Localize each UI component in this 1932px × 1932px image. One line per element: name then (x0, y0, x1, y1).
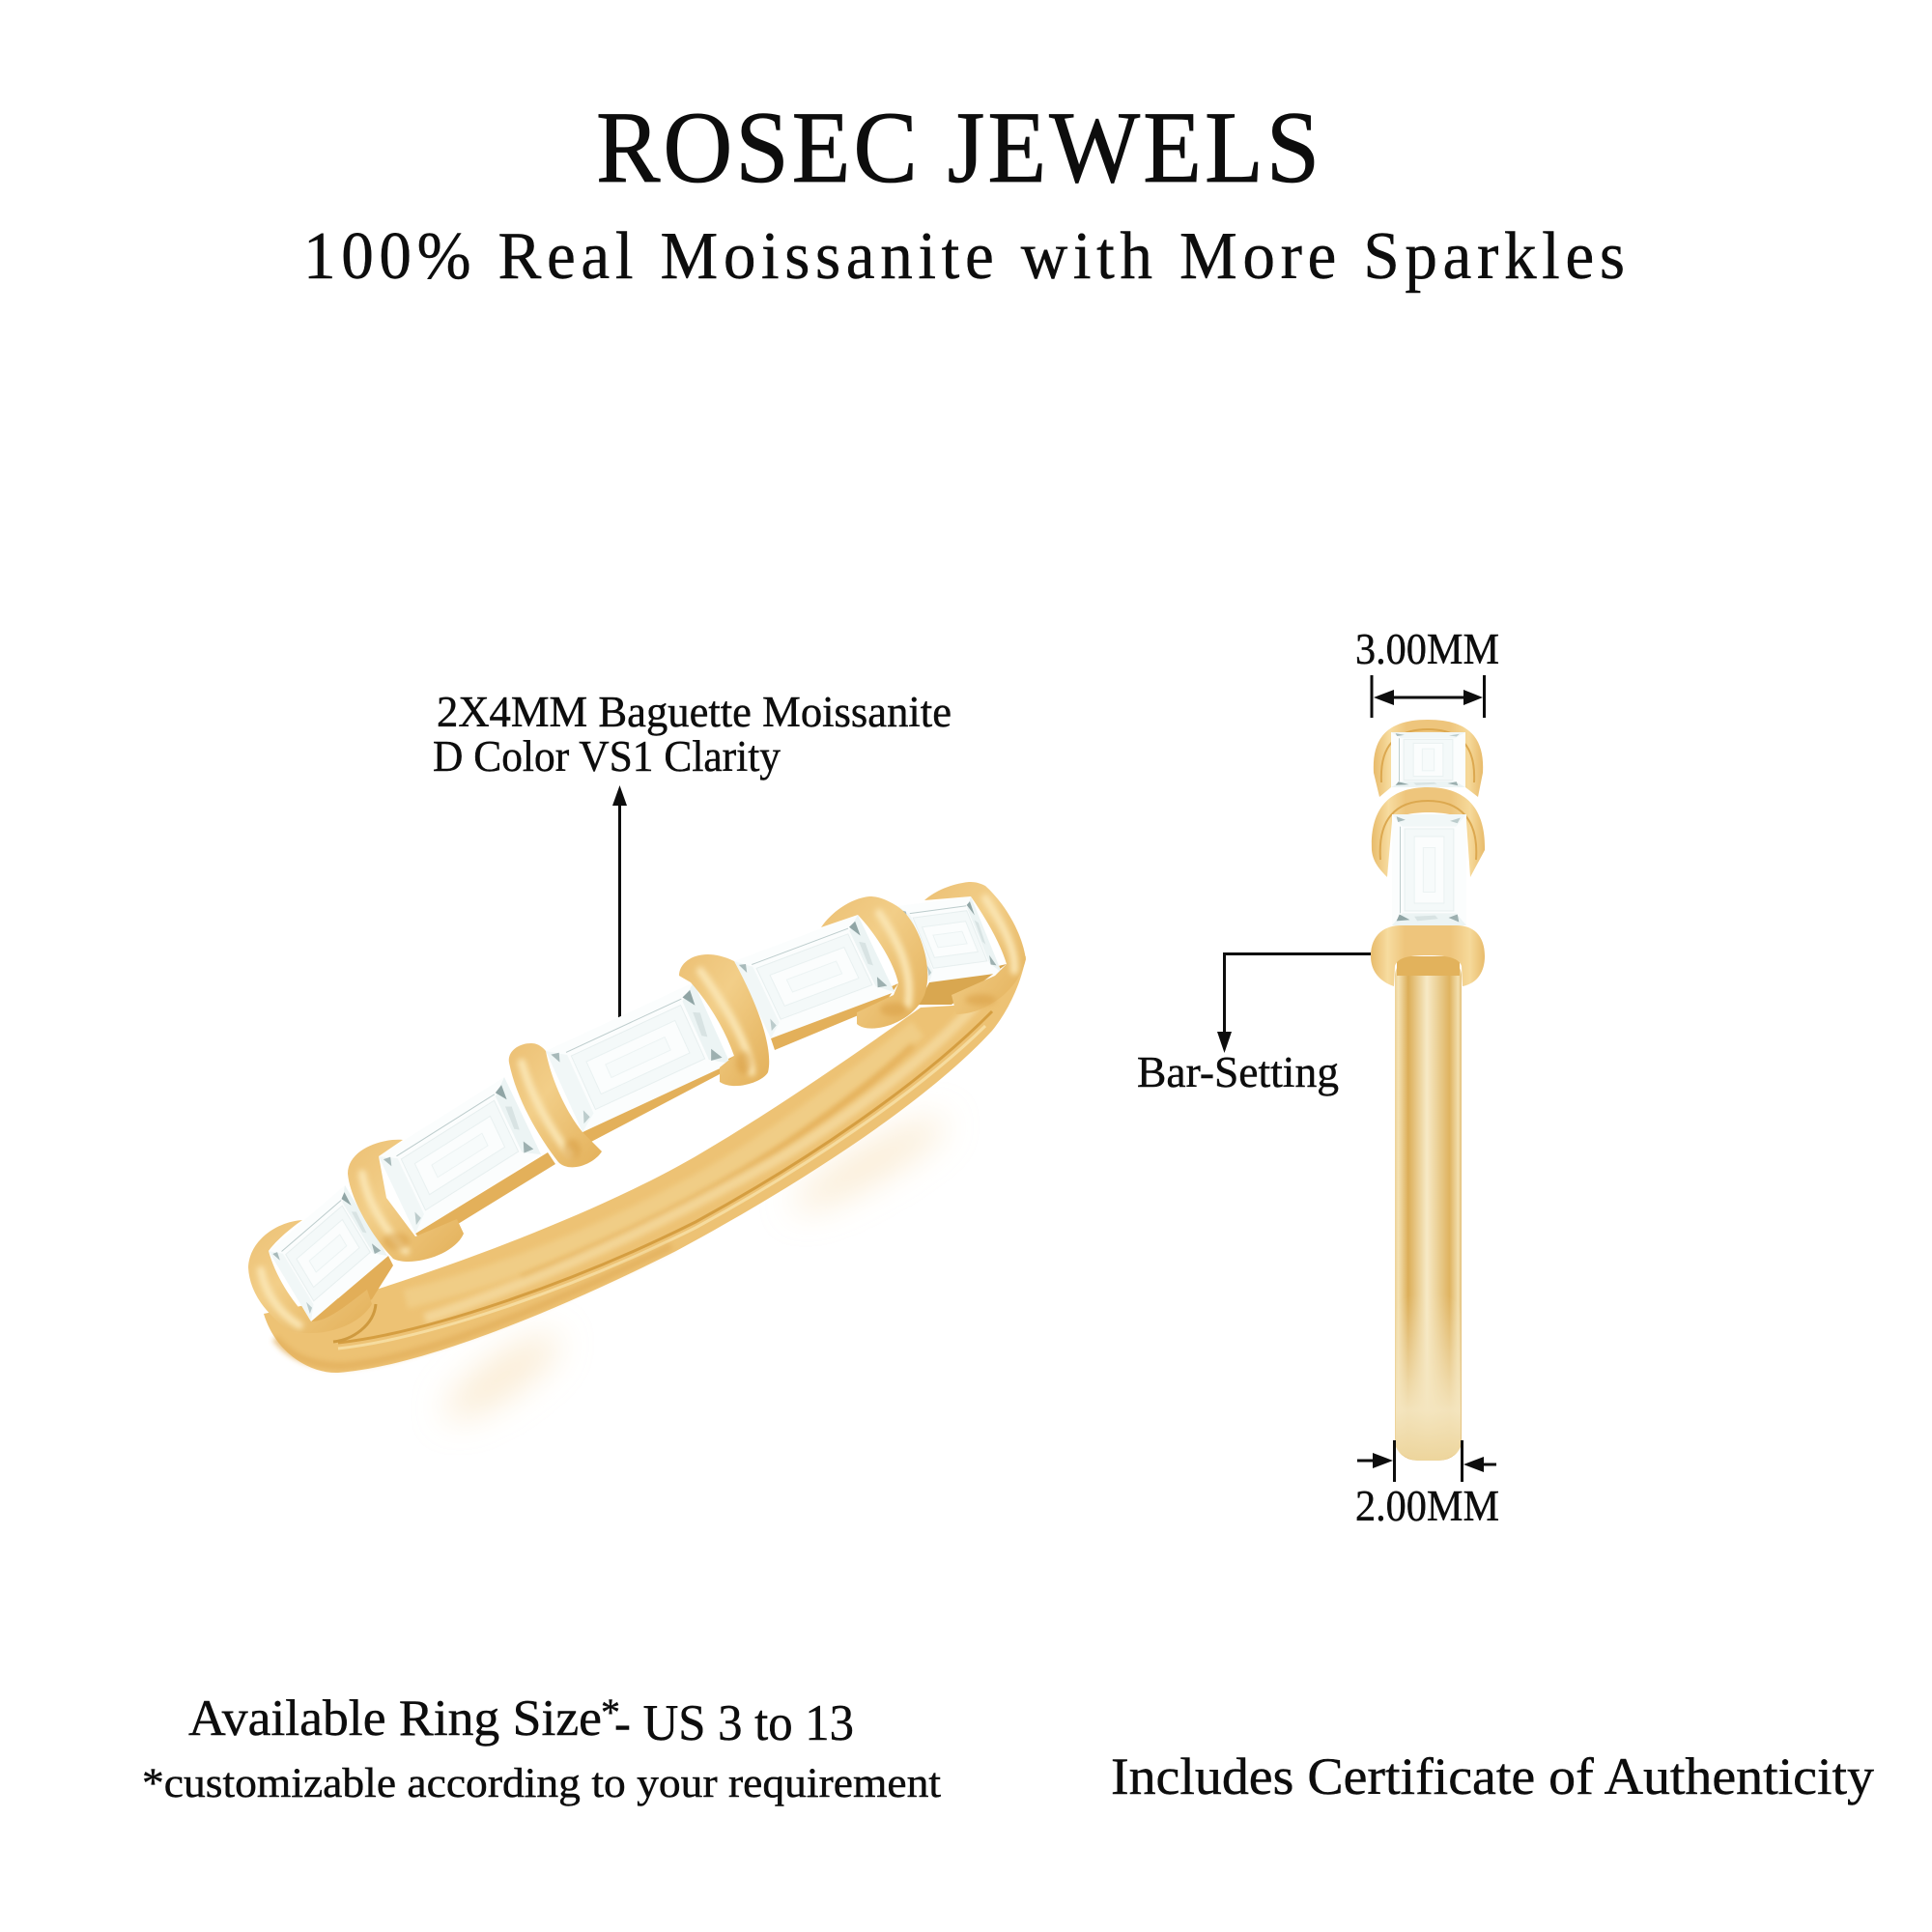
ring shadow (437, 1107, 952, 1430)
callout: stone specification: D Color VS1 Clarity (433, 732, 781, 781)
middle bar (1372, 787, 1485, 877)
certificate note: Includes Certificate of Authenticity (1111, 1747, 1874, 1805)
title: ROSEC JEWELS (596, 91, 1320, 205)
dimension: 2.00MM: 2.00MM (1355, 1482, 1499, 1530)
ring size text: * (601, 1690, 620, 1734)
callout: bar setting: Bar-Setting (1137, 1048, 1339, 1096)
dimension: 3.00MM (1355, 625, 1499, 718)
ring size text (188, 1690, 854, 1751)
callout: stone specification: 2X4MM Baguette Moissanite (437, 688, 952, 736)
ring: side view (1371, 720, 1485, 1461)
stone: far (1391, 732, 1465, 787)
bar highlights (261, 898, 1014, 1325)
ring shank (264, 956, 1026, 1373)
callout: bar setting (1137, 954, 1371, 1096)
lower gold rim under stones (311, 964, 1007, 1323)
bar settings (248, 882, 1026, 1333)
bottom bar (1371, 925, 1485, 986)
customization note: *customizable according to your requirement (142, 1761, 941, 1806)
ring shank (1395, 956, 1462, 1461)
dimension: 3.00MM: 3.00MM (1355, 625, 1499, 673)
bar lower shading (383, 994, 996, 1250)
stone: near (1392, 814, 1466, 925)
callout: stone specification (433, 688, 952, 781)
ring size text: - US 3 to 13 (614, 1695, 854, 1751)
stones (269, 896, 1002, 1321)
ring: angled view (248, 882, 1026, 1430)
subtitle: 100% Real Moissanite with More Sparkles (303, 218, 1625, 293)
ring size text: Available Ring Size (188, 1690, 602, 1747)
dimension: 2.00MM (1355, 1440, 1499, 1530)
arrow: to stone (612, 785, 627, 1022)
top bar (1374, 720, 1483, 797)
